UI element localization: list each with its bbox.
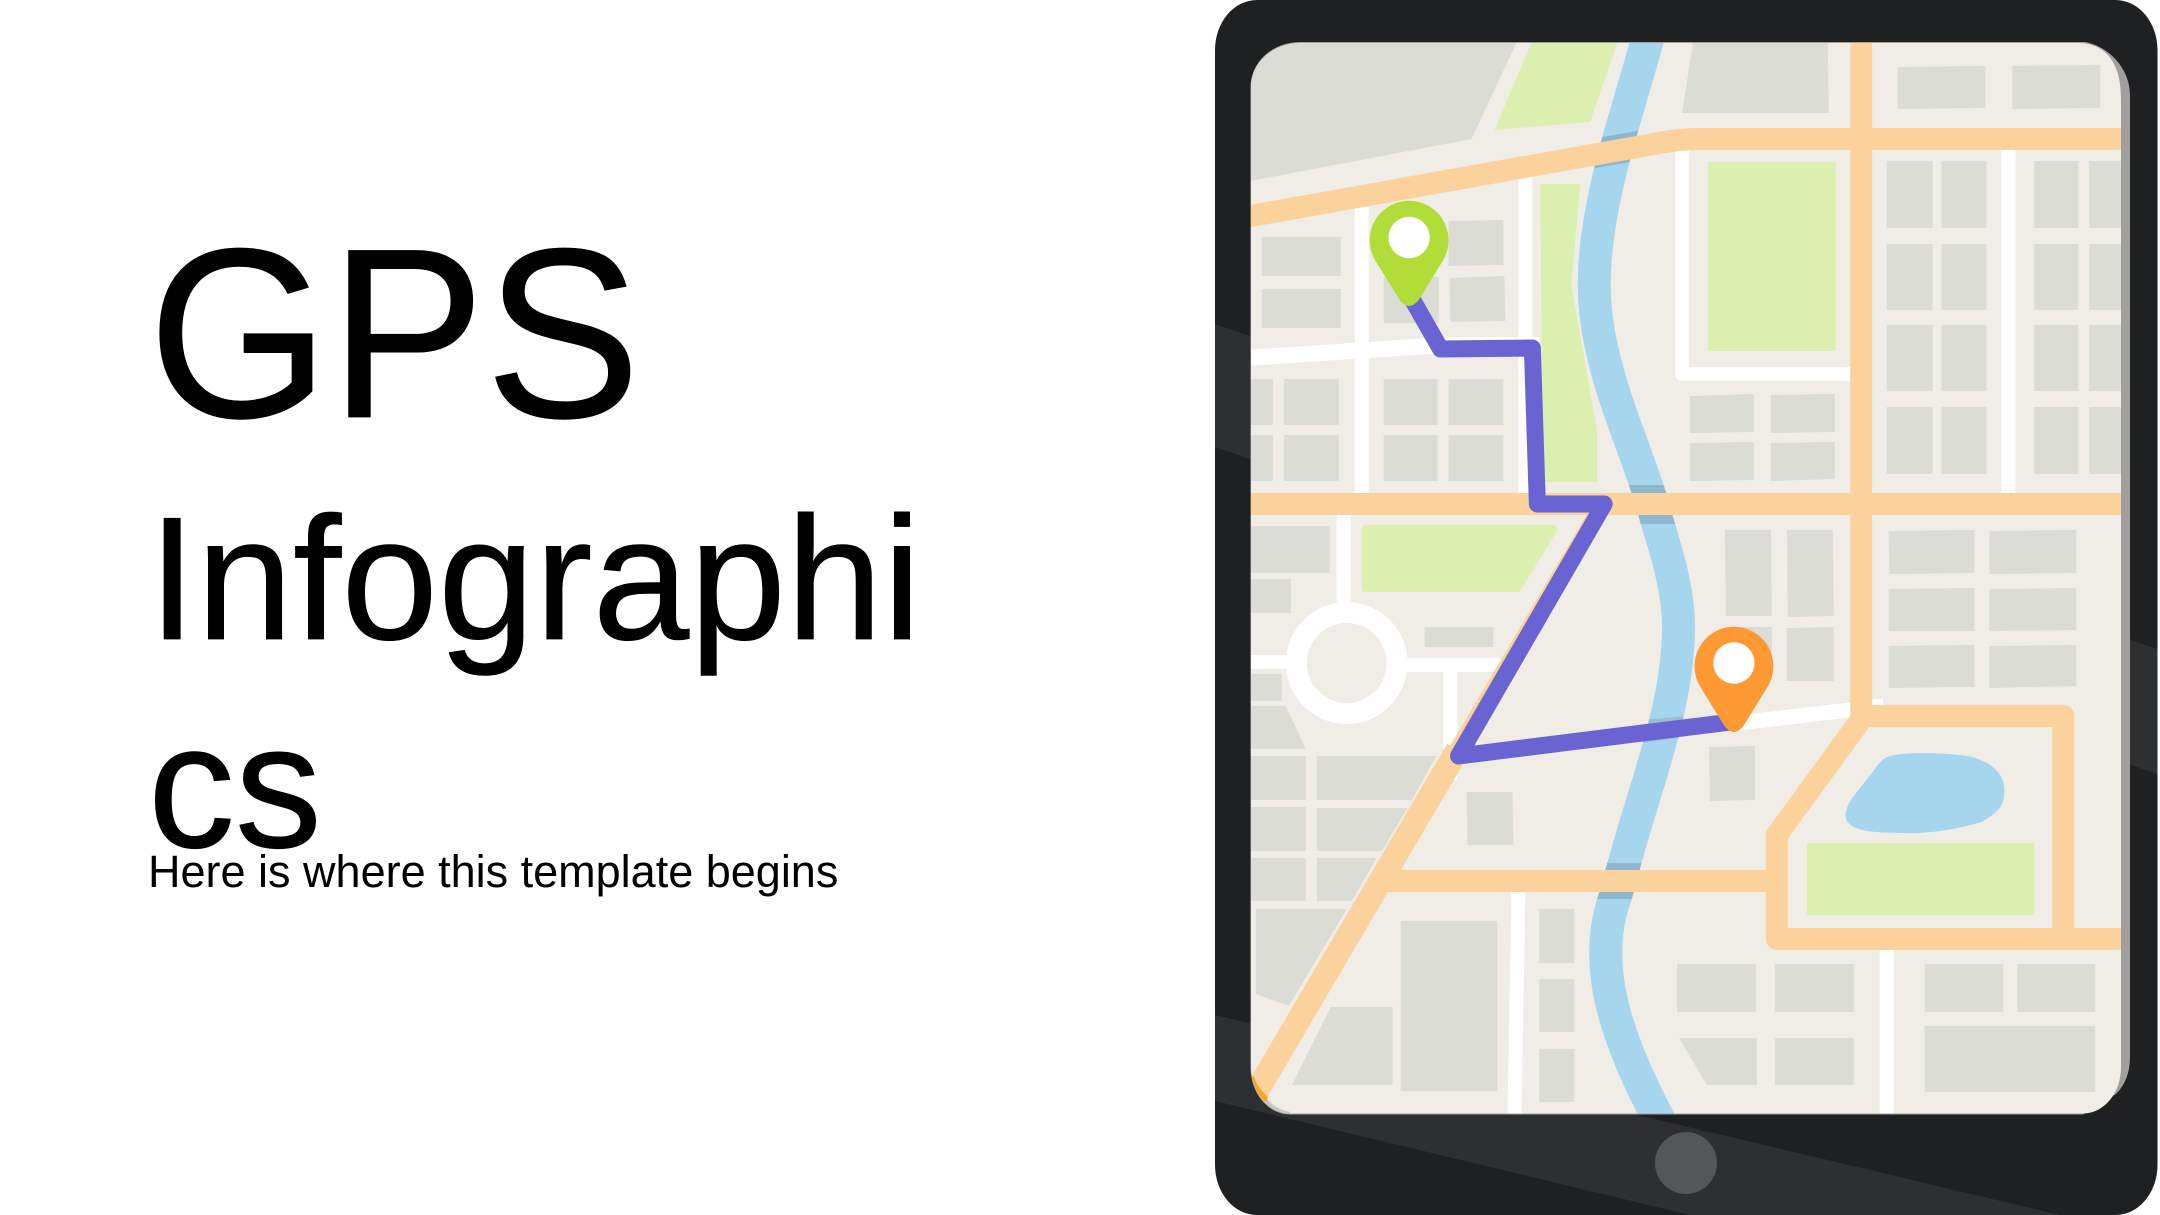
tablet body [1215,0,2158,1215]
title: GPS [148,199,641,469]
river [1594,33,1679,1124]
city blocks [1240,43,2123,1102]
shadow beneath route [1642,716,1684,743]
road corner accent [1251,1075,1268,1103]
screen edge [1250,42,2130,1114]
bridge shadows [1594,130,1676,899]
lake [1846,753,2004,833]
home button [1655,1132,1717,1194]
map [1240,33,2128,1124]
route line [1413,300,1731,756]
corner crescent [1266,1101,1290,1114]
icon: orange destination pin [1695,627,1773,732]
map ground [1251,43,2123,1114]
roundabout [1296,612,1397,714]
subtitle: Here is where this template begins [148,846,838,897]
title [148,199,921,885]
tablet device [1215,0,2160,1215]
map content [1240,33,2128,1124]
icon: green start pin [1370,201,1449,306]
screen reflections [1215,324,2160,1215]
title: Infographi [148,481,921,677]
parks [1366,43,2034,915]
title: cs [148,687,322,885]
orange roads [1240,43,2128,1120]
white streets [1245,145,2008,1118]
